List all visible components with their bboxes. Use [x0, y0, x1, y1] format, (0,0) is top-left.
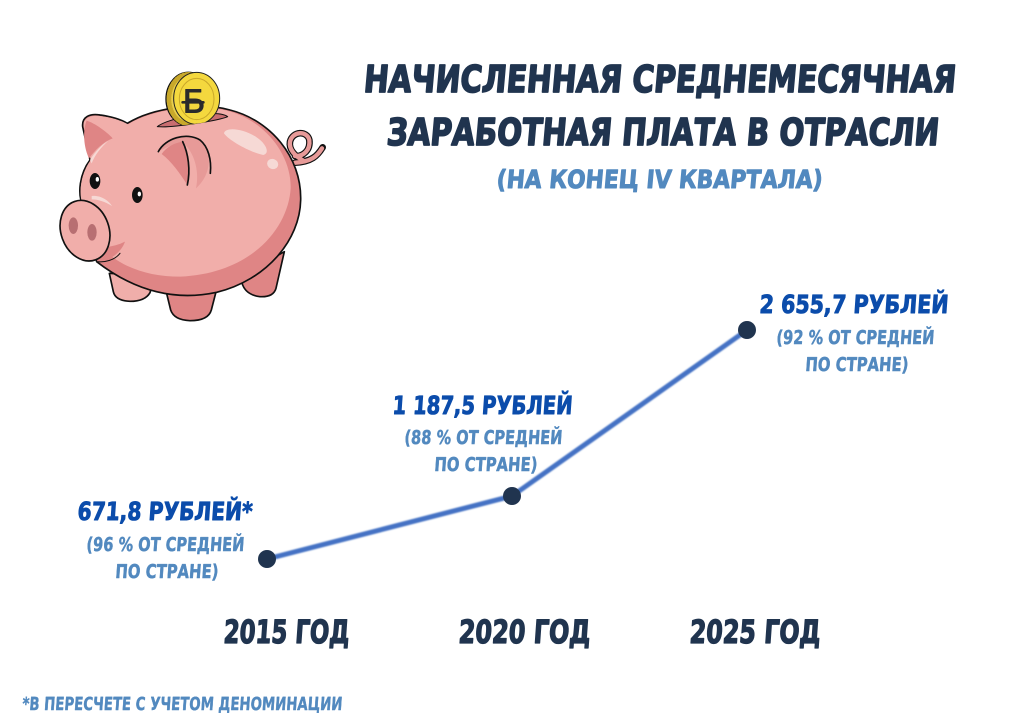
label 2020: ПО СТРАНЕ) [434, 454, 538, 476]
label 2015: ПО СТРАНЕ) [115, 561, 219, 583]
year axis labels: 2015 ГОД [222, 613, 351, 651]
label 2015: 671,8 РУБЛЕЙ* [77, 497, 254, 526]
year axis labels: 2020 ГОД [457, 613, 592, 651]
icon: slot and coin: Б [183, 83, 205, 120]
data point 2015 [258, 550, 276, 568]
icon: slot and coin [157, 72, 228, 127]
icon: piggy bank with coin [52, 72, 323, 321]
icon: snout [52, 193, 125, 268]
label 2025 [759, 290, 950, 376]
icon: back left leg [109, 273, 155, 301]
line chart [258, 321, 756, 568]
footnote: *В ПЕРЕСЧЕТЕ С УЧЕТОМ ДЕНОМИНАЦИИ [22, 694, 343, 715]
label 2015: (96 % ОТ СРЕДНЕЙ [86, 533, 245, 556]
icon: right leg [240, 252, 284, 297]
year axis labels: 2025 ГОД [688, 613, 822, 651]
icon: curly tail [290, 133, 323, 163]
icon: body light area [81, 107, 291, 277]
icon: pig body [80, 106, 301, 295]
icon: body highlights [90, 129, 280, 171]
subtitle: (НА КОНЕЦ IV КВАРТАЛА) [495, 165, 824, 194]
icon: front leg [165, 287, 217, 321]
label 2015 [77, 497, 254, 583]
icon: right ear [158, 136, 211, 188]
icon: eyes [90, 173, 143, 203]
data point 2020 [503, 487, 521, 505]
label 2025: (92 % ОТ СРЕДНЕЙ [776, 326, 935, 349]
title [362, 58, 958, 154]
icon: left ear [84, 121, 113, 158]
label 2025: ПО СТРАНЕ) [805, 354, 909, 376]
year axis labels [222, 613, 822, 651]
label 2020 [392, 391, 574, 476]
label 2025: 2 655,7 РУБЛЕЙ [759, 290, 950, 319]
data point 2025 [738, 321, 756, 339]
label 2020: (88 % ОТ СРЕДНЕЙ [404, 426, 563, 449]
label 2020: 1 187,5 РУБЛЕЙ [392, 391, 574, 420]
